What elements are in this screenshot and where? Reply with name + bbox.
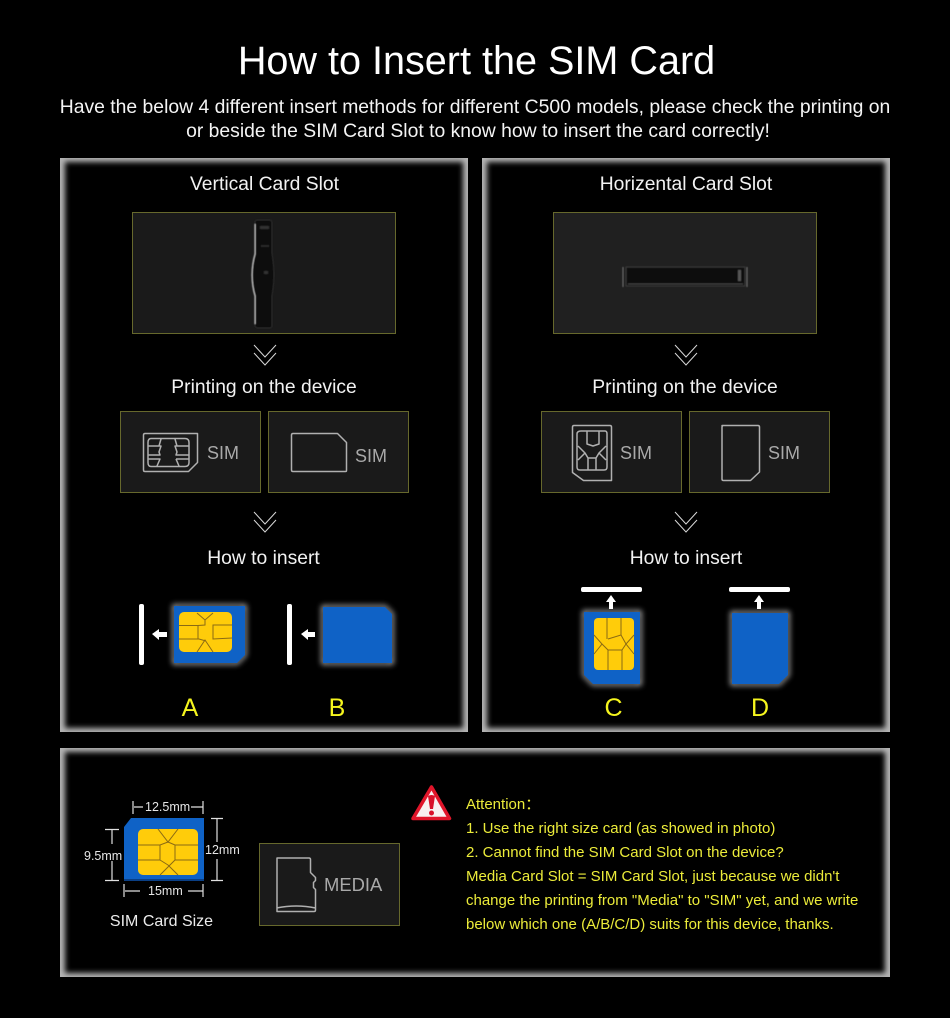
arrow: double chevron [254,512,276,532]
photo: vertical slot [132,212,396,334]
attention text: change the printing from "Media" to "SIM" yet, and we write [466,892,858,909]
intro text [60,96,890,142]
printing box: SIM blank: SIM [768,443,800,463]
printing box: SIM with chip: SIM [620,443,652,463]
heading: how to insert: How to insert [207,548,320,569]
panel: card size and attention [60,748,890,977]
heading: how to insert: How to insert [630,548,743,569]
printing box: SIM blank [268,412,408,492]
SIM card size diagram: 12.5mm [145,800,190,814]
photo: horizontal slot [554,212,816,334]
printing box: SIM with chip: SIM [207,443,239,463]
printing box: SIM blank: SIM [355,446,387,466]
attention text: 2. Cannot find the SIM Card Slot on the device? [466,844,784,861]
intro text: or beside the SIM Card Slot to know how to insert the card correctly! [186,120,770,142]
printing box: SIM with chip [120,412,260,492]
attention text: Attention： [466,796,540,813]
icon: warning triangle [413,787,450,818]
arrow: double chevron [675,512,697,532]
SIM card size diagram: 12mm [205,843,240,857]
media box: MEDIA [324,874,383,895]
SIM card size diagram: 15mm [148,884,183,898]
SIM card size diagram: 9.5mm [84,849,122,863]
attention text: Media Card Slot = SIM Card Slot, just because we didn't [466,868,840,885]
method D [729,587,790,684]
method A [139,604,245,665]
label C: C [604,694,623,722]
heading: printing on the device: Printing on the device [592,377,778,398]
method C [581,587,642,684]
heading: printing on the device: Printing on the device [171,377,357,398]
caption: SIM card size: SIM Card Size [110,913,213,930]
panel: horizontal card slot [482,158,890,732]
method B [287,604,392,665]
heading: vertical card slot: Vertical Card Slot [190,174,340,195]
arrow: double chevron [675,345,697,365]
title: How to Insert the SIM Card [238,39,715,83]
printing box: SIM with chip [542,412,682,492]
attention text: below which one (A/B/C/D) suits for this device, thanks. [466,916,834,933]
SIM card size diagram [84,800,240,898]
media box [260,844,400,926]
label B: B [329,694,345,722]
heading: horizontal card slot: Horizental Card Slot [600,174,773,195]
arrow: double chevron [254,345,276,365]
printing box: SIM blank [690,412,830,492]
label D: D [751,694,769,722]
panel: vertical card slot [60,158,468,732]
label A: A [182,694,199,722]
attention text: 1. Use the right size card (as showed in photo) [466,820,775,837]
intro text: Have the below 4 different insert methods for different C500 models, please check the printing on [60,96,890,118]
attention text [466,796,858,933]
